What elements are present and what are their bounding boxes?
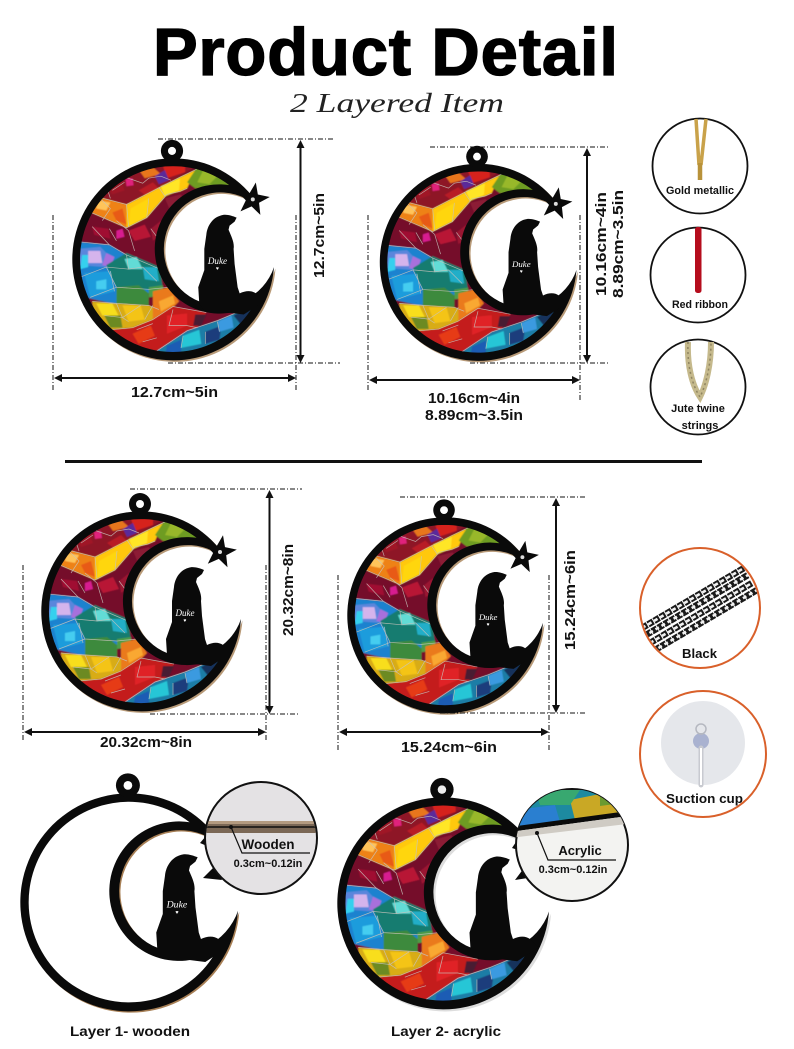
circle: suction cup [640,691,766,817]
dimensions 15.24cm: 15.24cm~6in [401,739,497,756]
dimensions 10.16cm [368,147,627,424]
magnifier: acrylic: Acrylic [558,843,602,858]
ornament 15.24cm: ♥ [487,623,490,628]
ornament 15.24cm [347,499,544,715]
ornament 20.32cm: Duke [174,608,194,618]
circle: black chain: Black [682,646,718,661]
dimensions 20.32cm [23,489,302,751]
circle: suction cup: Suction cup [666,791,743,806]
dimensions 12.7cm: 12.7cm~5in [311,193,328,278]
ornament 12.7cm: ♥ [216,266,219,272]
magnifier: acrylic [510,789,635,901]
magnifier: wooden [200,782,317,894]
dimensions 10.16cm: 8.89cm~3.5in [610,190,627,298]
dimensions 10.16cm: 10.16cm~4in [428,390,520,407]
ornament 15.24cm: Duke [478,612,498,622]
ornament: layer 1 wooden [20,773,317,1013]
divider [65,460,702,463]
magnifier: acrylic: 0.3cm~0.12in [539,864,608,876]
dimensions 15.24cm [338,497,587,756]
circle: jute twine strings [650,340,746,434]
circle: gold metallic: Gold metallic [666,185,734,197]
ornament 20.32cm: ♥ [184,618,187,624]
ornament: layer 1 wooden: Duke [166,899,188,910]
circle: black chain [640,548,760,668]
dimensions 15.24cm: 15.24cm~6in [562,550,579,650]
dimensions 10.16cm: 8.89cm~3.5in [425,407,523,424]
ornament 10.16cm: Duke [511,259,531,269]
title: Product Detail [153,15,618,90]
circle: jute twine strings: strings [682,420,718,432]
ornament 12.7cm [72,140,276,362]
circle: red ribbon [650,227,746,322]
dimensions 12.7cm [53,139,340,401]
ornament: layer 2 acrylic [337,778,635,1011]
dimensions 12.7cm: 12.7cm~5in [131,384,218,401]
circle: jute twine strings: Jute twine [671,403,725,415]
ornament 20.32cm [41,493,243,713]
subtitle: 2 Layered Item [290,88,504,118]
ornament 10.16cm [380,146,578,362]
ornament 10.16cm: ♥ [520,270,523,275]
circle: red ribbon: Red ribbon [672,299,728,311]
dimensions 20.32cm: 20.32cm~8in [280,544,297,636]
dimensions 10.16cm: 10.16cm~4in [593,192,610,296]
ornament 12.7cm: Duke [207,256,227,266]
circle: gold metallic [652,118,748,214]
ornament: layer 1 wooden: ♥ [175,910,179,916]
label: layer 2: Layer 2- acrylic [391,1023,501,1039]
magnifier: wooden: 0.3cm~0.12in [234,858,303,870]
dimensions 20.32cm: 20.32cm~8in [100,734,192,751]
magnifier: wooden: Wooden [242,837,294,852]
label: layer 1: Layer 1- wooden [70,1023,190,1039]
